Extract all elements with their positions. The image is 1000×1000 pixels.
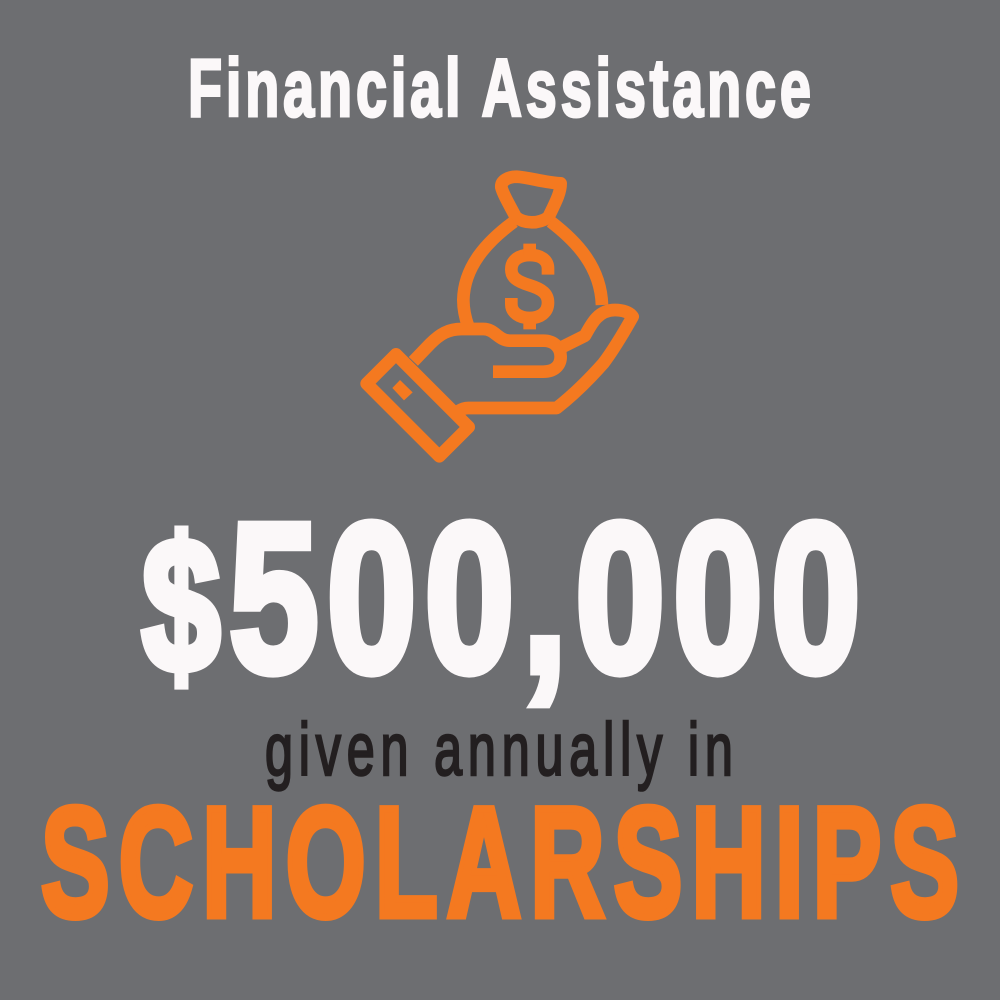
icon: hand holding money bag	[367, 177, 633, 456]
dollar symbol: $	[142, 500, 220, 712]
bag body	[463, 222, 602, 327]
thumb and palm	[457, 310, 633, 412]
hand	[413, 329, 561, 372]
subtitle: given annually in	[265, 710, 733, 791]
cuff	[367, 354, 469, 456]
dollar sign	[511, 244, 548, 329]
bag neck tie	[501, 177, 561, 222]
cuff button	[392, 380, 413, 400]
title: Financial Assistance	[188, 42, 811, 134]
digits: 500,000	[229, 480, 861, 716]
amount	[142, 480, 861, 716]
scholarships: SCHOLARSHIPS	[41, 776, 959, 950]
